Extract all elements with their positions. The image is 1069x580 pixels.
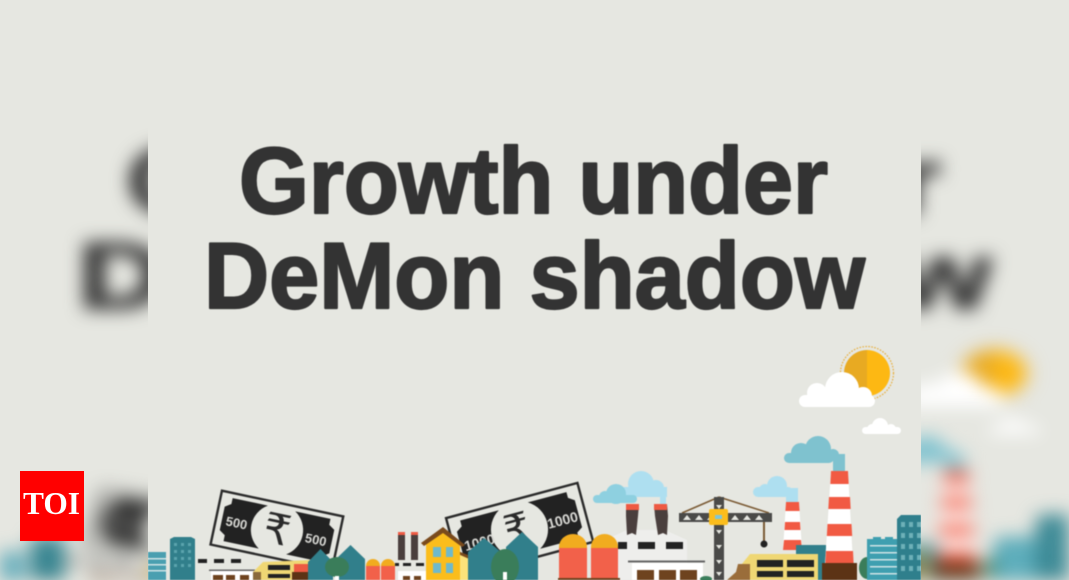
title: DeMon shadow [204,223,866,328]
icon: 1000 rupee banknote: ₹ [499,505,535,554]
icon: small factory with chimneys [395,532,428,580]
icon: left skyline buildings [148,537,195,580]
icon: 1000 rupee banknote [446,483,593,577]
icon: right skyline buildings [859,515,921,580]
icon: small white cloud [862,418,901,434]
icon: 500 rupee banknote [211,491,343,570]
blurred stretched background: DeMon shadow [77,223,992,329]
icon: small striped chimney with cloud [753,476,802,550]
icon: orange silos [558,534,620,580]
icon: 500 rupee banknote: 500 [224,513,249,533]
icon: yellow house [421,527,487,580]
icon: small orange silos [366,559,395,580]
icon: 500 rupee banknote: ₹ [259,504,295,555]
illustrated skyline scene [148,346,921,580]
icon: factory smoke clouds [593,471,667,506]
icon: large striped chimney with teal cloud [784,436,857,580]
icon: 1000 rupee banknote: 1000 [545,508,580,532]
icon: teal houses and trees right [468,532,538,580]
central panel [148,0,921,580]
icon: yellow warehouse [700,545,826,580]
blurred stretched background: Growth under [126,128,940,234]
icon: crane [679,497,772,580]
icon: sun [840,346,894,400]
icon: 500 rupee banknote: 500 [304,530,328,549]
title: Growth under [239,128,828,233]
icon: 1000 rupee banknote: 1000 [462,530,497,554]
icon: teal houses and tree [308,545,365,580]
icon: large white cloud [799,372,875,407]
TOI logo: TOI [23,485,80,521]
TOI logo [20,471,84,541]
icon: central factory [605,504,705,580]
title [204,128,866,328]
icon: left yellow warehouse [253,560,314,580]
icon: left low factory [198,559,255,580]
